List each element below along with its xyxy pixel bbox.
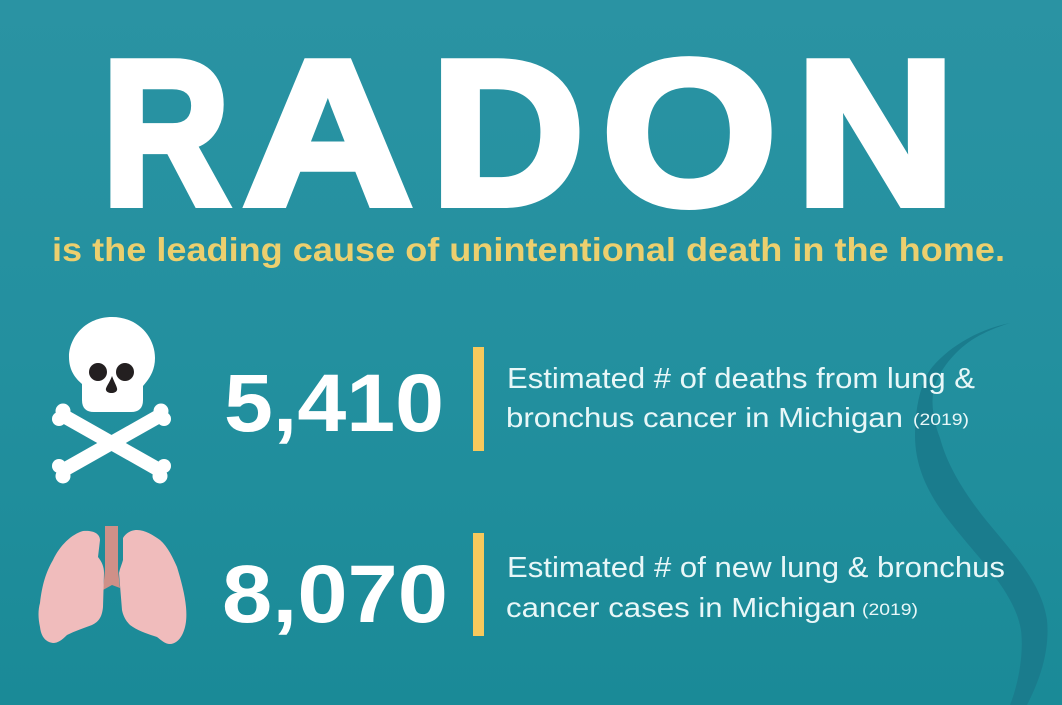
- description: new cases: cancer cases in Michigan: [506, 592, 856, 623]
- title: RADON: A: [243, 17, 413, 248]
- description: new cases: (2019): [862, 600, 918, 619]
- subtitle: is the leading cause of unintentional death in the home.: [52, 231, 1005, 268]
- description: new cases: Estimated # of new lung & bronchus: [507, 552, 1005, 584]
- description: deaths: [506, 363, 975, 433]
- icon: skull: [69, 317, 155, 412]
- title: RADON: N: [796, 19, 955, 248]
- icon: skull and crossbones: [52, 317, 171, 484]
- title: RADON: R: [102, 17, 230, 248]
- description: deaths: Estimated # of deaths from lung &: [507, 363, 975, 395]
- icon: lungs: [38, 526, 186, 644]
- stat: 8,070: 8,070: [222, 549, 448, 640]
- decorative swoosh: [915, 323, 1048, 705]
- divider bar 2: [473, 533, 484, 636]
- title: RADON: O: [602, 18, 777, 248]
- icon: trachea: [103, 526, 120, 590]
- icon: right lung: [119, 530, 186, 644]
- stat: 5,410: 5,410: [224, 358, 444, 449]
- description: new cases: [506, 552, 1005, 623]
- title: RADON: D: [431, 19, 584, 248]
- description: deaths: bronchus cancer in Michigan: [506, 402, 903, 433]
- icon: crossbones: [52, 404, 171, 484]
- icon: left lung: [38, 531, 104, 643]
- description: deaths: (2019): [913, 410, 969, 429]
- title: RADON: [102, 17, 955, 248]
- divider bar 1: [473, 347, 484, 451]
